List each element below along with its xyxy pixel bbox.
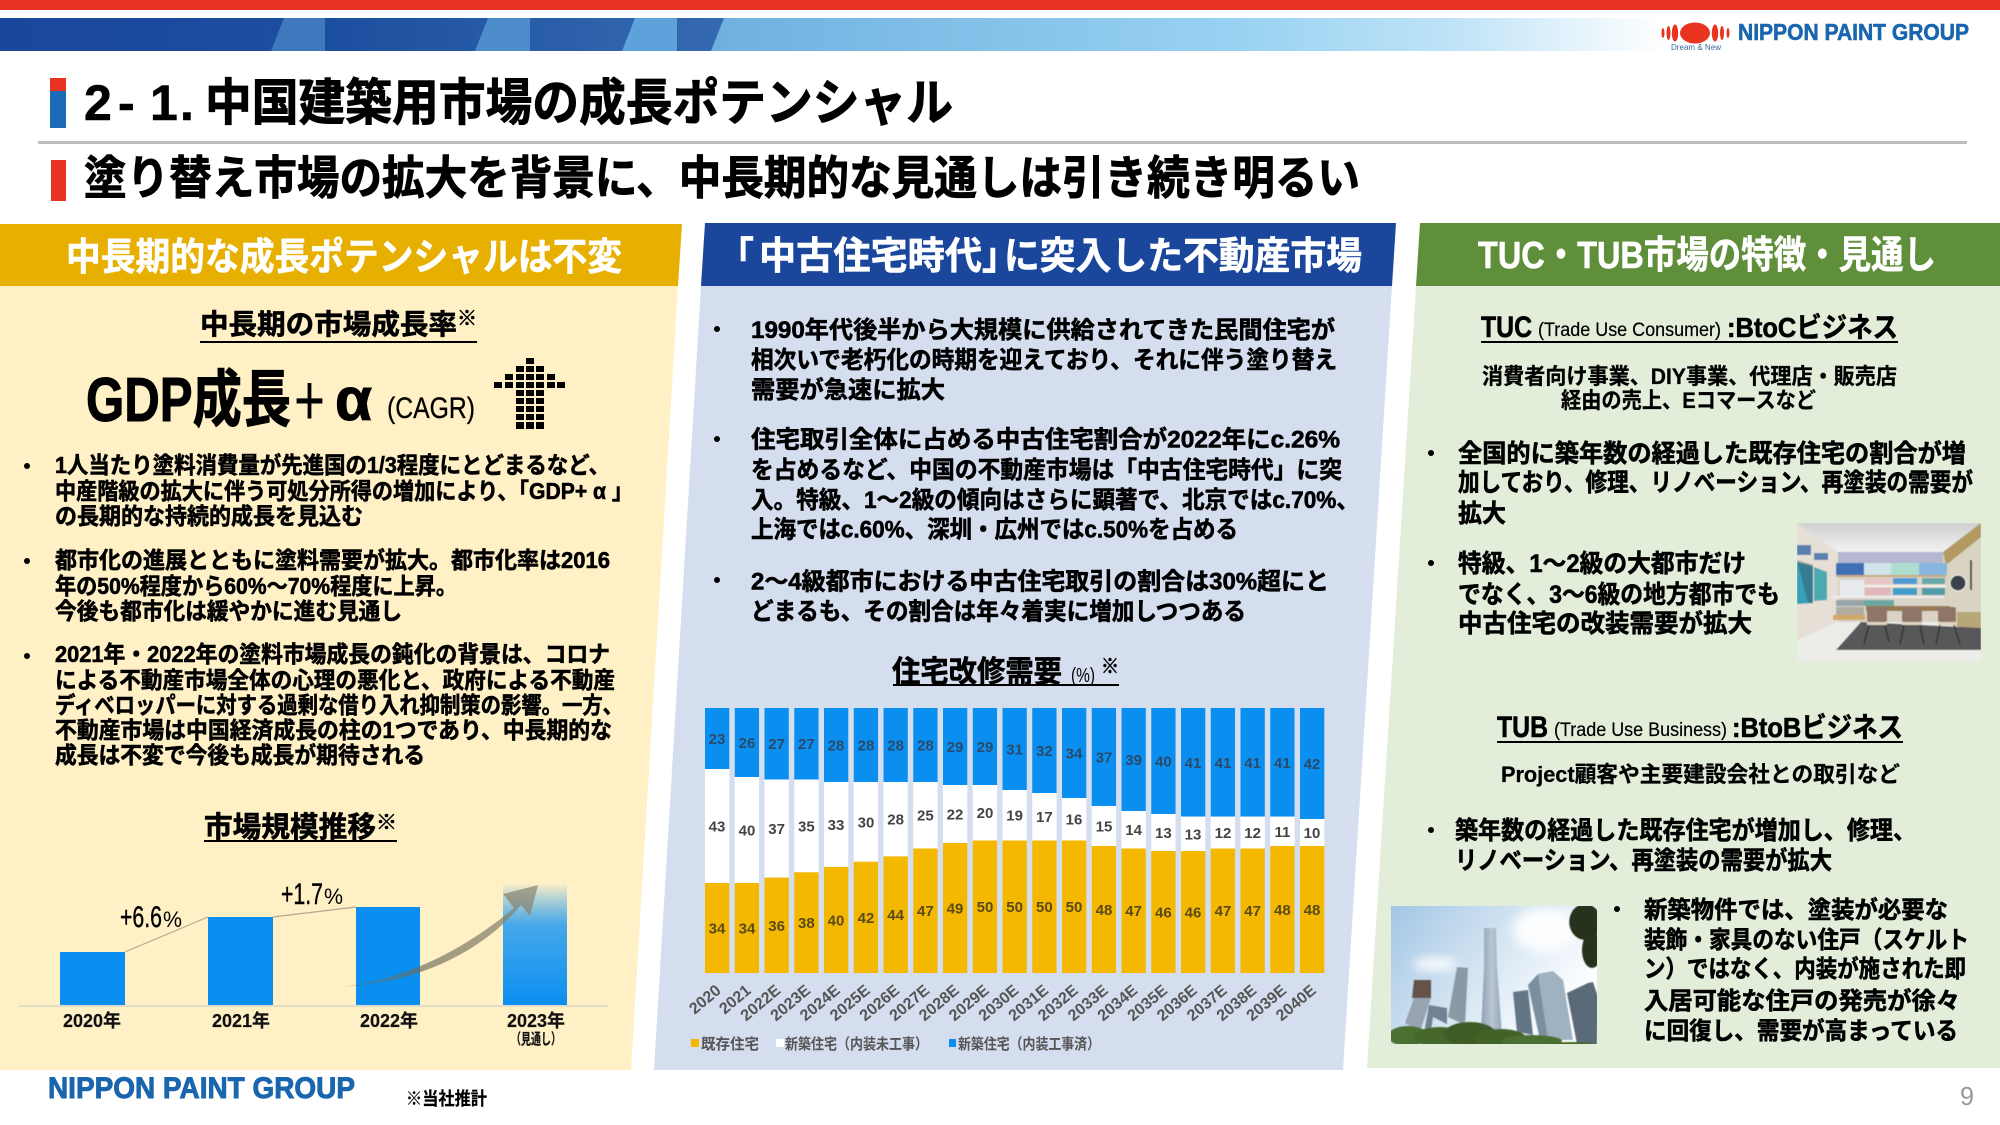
text block: growth drivers: 年の50%程度から60%～70%程度に上昇。 [55,573,457,599]
bar chart: market size: （見通し） [511,1031,561,1048]
label: +1.7%: % [324,884,343,909]
panel heading: real estate market: 中古住宅時代 [759,236,982,278]
label: +1.7%: +1.7 [281,878,323,911]
text block: used housing era: 入。特級、1～2級の傾向はさらに顕著で、北京ではc.70%、 [751,487,1359,514]
stacked bar chart: housing demand 2020-2040E: 44 [887,907,905,924]
text block: TUC bullets: 全国的に築年数の経過した既存住宅の割合が増 [1458,439,1966,468]
text block: TUC description: 経由の売上、Eコマースなど [1561,388,1816,413]
text block: growth drivers: による不動産市場全体の心理の悪化と、政府による不動産 [55,667,615,693]
stacked bar chart: housing demand 2020-2040E: 48 [1096,902,1112,919]
stacked bar chart: housing demand 2020-2040E: 13 [1155,825,1172,842]
text block: used housing era: 需要が急速に拡大 [751,376,945,404]
text block: growth drivers [24,452,633,768]
stacked bar chart: housing demand 2020-2040E: 29 [977,739,993,756]
logo: Nippon Paint Group header: NIPPON PAINT GROUP [1738,19,1969,45]
text block: TUC bullets: 拡大 [1458,500,1506,528]
heading: TUC: (Trade Use Consumer) [1538,320,1721,341]
text block: growth drivers: 成長は不変で今後も成長が期待される [55,742,425,768]
stacked bar chart: housing demand 2020-2040E: 2031E [1006,982,1052,1025]
title: 中国建築用市場の成長ポテンシャル [205,75,953,131]
text block: growth drivers: 今後も都市化は緩やかに進む見通し [55,598,402,624]
stacked bar chart: housing demand 2020-2040E: 42 [1304,756,1320,773]
stacked bar chart: housing demand 2020-2040E: 2035E [1125,982,1171,1025]
stacked bar chart: housing demand 2020-2040E: 2037E [1184,982,1231,1025]
stacked bar chart: housing demand 2020-2040E: 47 [917,903,934,920]
text block: TUB bullet two: 入居可能な住戸の発売が徐々 [1644,987,1960,1015]
stacked bar chart: housing demand 2020-2040E: 2023E [768,982,814,1025]
stacked bar chart: housing demand 2020-2040E: 31 [1006,742,1023,758]
heading: TUC: TUC [1481,311,1532,344]
stacked bar chart: housing demand 2020-2040E: 48 [1274,902,1291,919]
stacked bar chart: housing demand 2020-2040E: 36 [768,918,785,935]
text block: growth drivers: ディベロッパーに対する過剰な借り入れ抑制策の影響。一方、 [55,692,623,718]
page number: 9 [1960,1081,1974,1111]
stacked bar chart: housing demand 2020-2040E: 2040E [1273,982,1320,1025]
stacked bar chart: housing demand 2020-2040E: 41 [1244,755,1261,772]
bar chart: market size: 2020年 [63,1010,121,1031]
stacked bar chart: housing demand 2020-2040E: 41 [1185,755,1201,772]
text block: used housing era: を占めるなど、中国の不動産市場は「中古住宅時代」に突 [751,457,1342,484]
arrow: growth trend [338,885,538,987]
heading: TUB: :BtoBビジネス [1732,712,1903,743]
stacked bar chart: housing demand 2020-2040E: 28 [917,738,934,754]
stacked bar chart: housing demand 2020-2040E: 50 [1036,899,1053,916]
formula: GDP growth + alpha: α [335,366,372,433]
stacked bar chart: housing demand 2020-2040E: 28 [887,812,904,829]
stacked bar chart: housing demand 2020-2040E: 47 [1215,903,1231,920]
stacked bar chart: housing demand 2020-2040E: 28 [828,738,844,754]
text block: growth drivers: 中産階級の拡大に伴う可処分所得の増加により、「GDP+ α 」 [55,478,633,504]
text block: TUC bullets: でなく、3～6級の地方都市でも [1458,581,1780,609]
heading: housing renovation demand: (%) [1071,665,1095,687]
stacked bar chart: housing demand 2020-2040E: 33 [828,817,844,834]
label: +6.6%: % [163,907,182,932]
panel heading: growth potential [0,224,682,286]
stacked bar chart: housing demand 2020-2040E: 2030E [976,982,1022,1025]
stacked bar chart: housing demand 2020-2040E: 12 [1244,825,1261,842]
panel heading: TUC and TUB market: TUC・TUB市場の特徴・見通し [1478,235,1936,277]
stacked bar chart: housing demand 2020-2040E: 28 [858,738,874,754]
stacked bar chart: housing demand 2020-2040E: 2036E [1154,982,1201,1025]
image: paint store interior [1797,523,1981,662]
logo: Nippon Paint Group header: Dream & New [1671,43,1721,52]
stacked bar chart: housing demand 2020-2040E: 41 [1274,755,1291,772]
bar chart: market size: 2022年 [360,1010,418,1031]
heading: market size trend: 市場規模推移 [204,811,376,844]
subtitle: 塗り替え市場の拡大を背景に、中長期的な見通しは引き続き明るい [84,152,1360,204]
stacked bar chart: housing demand 2020-2040E: 23 [709,731,725,748]
legend: housing types [691,1035,1100,1053]
panel heading: real estate market: 」 [982,236,1018,278]
text block: TUB bullet two: 新築物件では、塗装が必要な [1644,896,1948,924]
stacked bar chart: housing demand 2020-2040E: 15 [1096,818,1112,836]
panel heading: TUC and TUB market [1416,223,2000,286]
stacked bar chart: housing demand 2020-2040E: 30 [858,814,874,831]
stacked bar chart: housing demand 2020-2040E: 49 [947,900,963,918]
heading: TUB: (Trade Use Business) [1554,720,1727,741]
text block: growth drivers: 2021年・2022年の塗料市場成長の鈍化の背景は、コロナ [55,641,610,667]
stacked bar chart: housing demand 2020-2040E: 17 [1036,809,1053,826]
formula: GDP growth + alpha: + [294,361,325,441]
text block: TUB bullet one: 築年数の経過した既存住宅が増加し、修理、 [1455,816,1916,845]
stacked bar chart: housing demand 2020-2040E: 2025E [827,982,874,1025]
stacked bar chart: housing demand 2020-2040E: 2020 [686,982,725,1018]
heading: TUB [1497,711,1903,744]
stacked bar chart: housing demand 2020-2040E: 28 [887,738,904,754]
stacked bar chart: housing demand 2020-2040E: 12 [1215,825,1231,842]
legend: housing types: 新築住宅（内装工事済） [958,1035,1100,1053]
stacked bar chart: housing demand 2020-2040E: 48 [1304,902,1320,919]
stacked bar chart: housing demand 2020-2040E: 40 [1155,754,1172,770]
text block: growth drivers: 不動産市場は中国経済成長の柱の1つであり、中長期的な [55,717,612,743]
text block: TUC bullets [1428,439,1973,638]
text block: growth drivers: 1人当たり塗料消費量が先進国の1/3程度にとどまるなど、 [55,452,610,478]
formula: GDP growth + alpha: GDP成長 [86,366,291,435]
stacked bar chart: housing demand 2020-2040E: 50 [977,899,993,916]
stacked bar chart: housing demand 2020-2040E: 46 [1155,904,1172,922]
stacked bar chart: housing demand 2020-2040E: 37 [768,821,785,838]
stacked bar chart: housing demand 2020-2040E: 40 [739,822,755,840]
bar chart: market size [19,878,608,1048]
stacked bar chart: housing demand 2020-2040E: 2039E [1244,982,1290,1025]
text block: TUB bullet one: リノベーション、再塗装の需要が拡大 [1455,846,1832,875]
stacked bar chart: housing demand 2020-2040E: 47 [1125,903,1142,920]
text block: used housing era: 上海ではc.60%、深圳・広州ではc.50%を占める [751,516,1238,544]
stacked bar chart: housing demand 2020-2040E: 14 [1125,822,1143,839]
stacked bar chart: housing demand 2020-2040E: 2024E [797,982,844,1025]
stacked bar chart: housing demand 2020-2040E: 2022E [738,982,784,1025]
panel heading: real estate market: に突入した不動産市場 [1004,236,1362,278]
text block: TUC description [1482,364,1897,413]
text block: TUB description: Project顧客や主要建設会社との取引など [1501,762,1900,787]
stacked bar chart: housing demand 2020-2040E: 22 [947,806,963,824]
text block: used housing era: 2～4級都市における中古住宅取引の割合は30%超にと [751,568,1329,596]
legend: housing types: 新築住宅（内装未工事） [785,1035,928,1053]
legend: housing types: 既存住宅 [701,1035,759,1053]
stacked bar chart: housing demand 2020-2040E: 20 [977,805,993,822]
formula: GDP growth + alpha [86,361,475,441]
text block: used housing era [714,316,1359,626]
stacked bar chart: housing demand 2020-2040E: 2027E [887,982,933,1025]
panel heading: real estate market: 「 [718,236,754,278]
text block: used housing era: 相次いで老朽化の時期を迎えており、それに伴う塗り替え [751,347,1337,374]
footnote: ※当社推計 [406,1089,487,1109]
label: +6.6%: +6.6 [120,901,162,934]
stacked bar chart: housing demand 2020-2040E: 2038E [1214,982,1260,1025]
heading: housing renovation demand: ※ [1101,656,1119,678]
text block: TUC bullets: 中古住宅の改装需要が拡大 [1458,609,1752,638]
stacked bar chart: housing demand 2020-2040E: 50 [1006,899,1023,916]
stacked bar chart: housing demand 2020-2040E: 2032E [1035,982,1082,1025]
panel: real estate market [654,223,1396,1070]
stacked bar chart: housing demand 2020-2040E: 2028E [916,982,963,1025]
heading: TUB: TUB [1497,711,1548,744]
stacked bar chart: housing demand 2020-2040E [686,708,1324,1025]
heading: market size trend: ※ [376,812,397,834]
panel: TUC and TUB market [1367,223,2000,1068]
stacked bar chart: housing demand 2020-2040E: 38 [798,915,815,932]
stacked bar chart: housing demand 2020-2040E: 32 [1036,743,1053,760]
title: 2-1. [84,75,194,131]
stacked bar chart: housing demand 2020-2040E: 19 [1006,808,1023,825]
stacked bar chart: housing demand 2020-2040E: 34 [709,920,726,938]
bar chart: market size: 2021年 [212,1010,270,1031]
text block: used housing era: 1990年代後半から大規模に供給されてきた民間住宅が [751,316,1335,344]
stacked bar chart: housing demand 2020-2040E: 25 [917,808,934,825]
stacked bar chart: housing demand 2020-2040E: 47 [1244,903,1261,920]
heading: mid-long term growth rate: 中長期の市場成長率 [200,309,457,340]
text block: TUC description: 消費者向け事業、DIY事業、代理店・販売店 [1482,364,1897,389]
stacked bar chart: housing demand 2020-2040E: 2026E [857,982,903,1025]
text block: TUB bullet two [1614,896,1969,1045]
text block: TUB bullet one [1428,816,1916,875]
icon: dotted up arrow [494,358,565,429]
stacked bar chart: housing demand 2020-2040E: 41 [1215,755,1231,772]
panel heading: growth potential: 中長期的な成長ポテンシャルは不変 [66,237,622,279]
stacked bar chart: housing demand 2020-2040E: 37 [1096,750,1112,766]
heading: TUC [1481,311,1898,344]
stacked bar chart: housing demand 2020-2040E: 34 [739,920,756,938]
text block: TUB bullet two: ン）ではなく、内装が施された即 [1644,955,1966,983]
bar chart: market size: 2023年 [507,1010,565,1031]
stacked bar chart: housing demand 2020-2040E: 50 [1066,899,1082,916]
logo: Nippon Paint Group header [1662,19,1969,52]
stacked bar chart: housing demand 2020-2040E: 42 [858,910,874,927]
stacked bar chart: housing demand 2020-2040E: 34 [1066,746,1083,762]
stacked bar chart: housing demand 2020-2040E: 29 [947,739,963,756]
stacked bar chart: housing demand 2020-2040E: 2034E [1095,982,1141,1025]
stacked bar chart: housing demand 2020-2040E: 43 [709,818,725,836]
footer logo: NIPPON PAINT GROUP [48,1072,355,1105]
text block: TUB bullet two: に回復し、需要が高まっている [1644,1017,1958,1045]
stacked bar chart: housing demand 2020-2040E: 46 [1185,904,1201,922]
stacked bar chart: housing demand 2020-2040E: 40 [828,912,844,930]
text block: growth drivers: 都市化の進展とともに塗料需要が拡大。都市化率は2016 [55,547,610,573]
formula: GDP growth + alpha: (CAGR) [387,392,475,425]
heading: TUC: :BtoCビジネス [1727,312,1898,343]
stacked bar chart: housing demand 2020-2040E: 39 [1125,752,1142,769]
text block: growth drivers: の長期的な持続的成長を見込む [55,503,363,529]
text block: used housing era: どまるも、その割合は年々着実に増加しつつある [751,598,1246,626]
stacked bar chart: housing demand 2020-2040E: 13 [1185,826,1201,843]
stacked bar chart: housing demand 2020-2040E: 27 [768,736,785,753]
text block: used housing era: 住宅取引全体に占める中古住宅割合が2022年にc.26% [751,426,1340,454]
stacked bar chart: housing demand 2020-2040E: 35 [798,818,815,836]
stacked bar chart: housing demand 2020-2040E: 11 [1274,824,1290,841]
stacked bar chart: housing demand 2020-2040E: 10 [1304,825,1320,842]
stacked bar chart: housing demand 2020-2040E: 27 [798,736,815,753]
stacked bar chart: housing demand 2020-2040E: 2033E [1065,982,1112,1025]
image: high-rise buildings [1388,904,1602,1048]
heading: mid-long term growth rate: ※ [457,308,477,330]
text block: TUC bullets: 特級、1～2級の大都市だけ [1458,550,1746,578]
panel: growth potential [0,224,682,1070]
stacked bar chart: housing demand 2020-2040E: 2021 [716,982,755,1018]
header gradient band [0,18,1665,51]
stacked bar chart: housing demand 2020-2040E: 16 [1066,812,1082,829]
stacked bar chart: housing demand 2020-2040E: 2029E [946,982,993,1025]
top red bar [0,0,2000,10]
panel heading: real estate market [701,223,1396,286]
stacked bar chart: housing demand 2020-2040E: 26 [739,735,755,752]
text block: TUB bullet two: 装飾・家具のない住戸（スケルト [1644,927,1969,954]
heading: housing renovation demand: 住宅改修需要 [892,656,1062,689]
